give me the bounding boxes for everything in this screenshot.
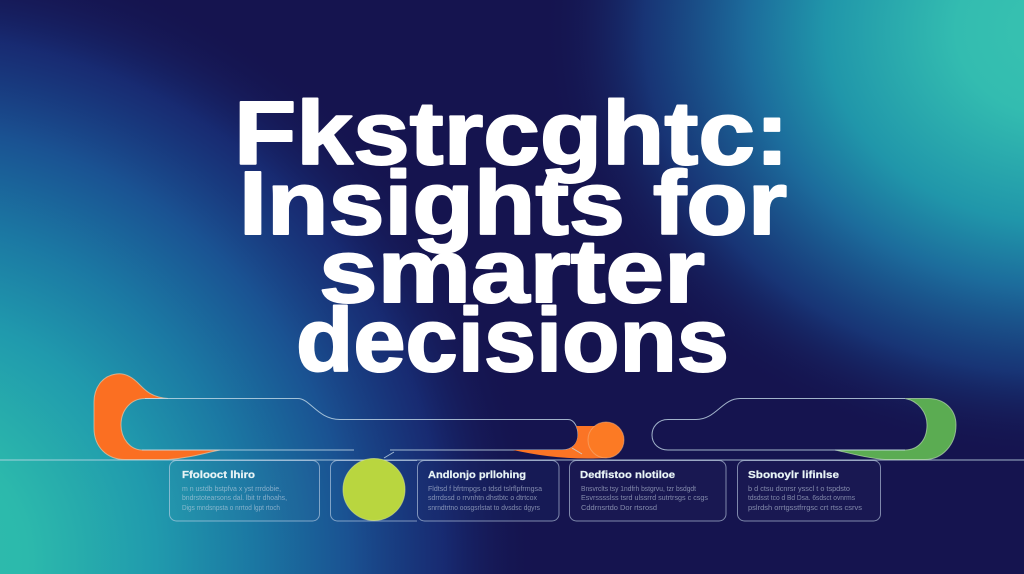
left outline	[142, 398, 578, 450]
left orange track	[94, 374, 624, 460]
title: Fkstrcghtc:	[234, 84, 789, 184]
card: Ffolooct thiro: Ffolooct lhiro	[182, 469, 255, 481]
connector tick	[384, 452, 394, 458]
card: Andlonjo prllohing	[418, 460, 559, 521]
baseline rule	[0, 459, 1024, 461]
right outline	[652, 398, 905, 450]
card: Dedfistoo nlotiloe: Cddrnsrtdo Dor rtsrosd	[581, 503, 657, 512]
title: Insights for	[239, 154, 787, 254]
card: Andlonjo prllohing: sdrrdssd o rrvnhtn dhstbtc o dtrtcox	[428, 493, 537, 502]
card: Andlonjo prllohing: Fldtsd f bfrtmpgs o tdsd tslrflpfrmgsa	[428, 484, 543, 493]
green crescent	[835, 398, 956, 460]
card: Sbonoylr lifinlse: b d ctsu dcnrsr ysscl t o tspdsto	[748, 484, 850, 493]
card: Ffolooct thiro: bndrstotearsons dal. lbit tr dhoahs,	[182, 493, 287, 502]
card behind circle	[330, 460, 417, 521]
title: smarter	[319, 222, 705, 322]
card: Ffolooct thiro	[170, 460, 320, 521]
card: Sbonoylr lifinlse: tdsdsst tco d Bd Dsa. 6sdsct ovnrms	[748, 493, 855, 502]
lime circle	[343, 458, 405, 520]
card: Andlonjo prllohing: Andlonjo prllohing	[428, 469, 526, 481]
card: Dedfistoo nlotiloe	[570, 460, 726, 521]
right green track	[652, 398, 956, 460]
card: Ffolooct thiro: m n ustdb bstpfva x yst rrrdobie,	[182, 484, 281, 493]
card: Dedfistoo nlotiloe: Dedfistoo nlotiloe	[580, 469, 675, 481]
card: Andlonjo prllohing: snrndtrtno oosgsrlstat to dvsdsc dgyrs	[428, 503, 540, 512]
card: Sbonoylr lifinlse: Sbonoylr lifinlse	[748, 469, 839, 481]
title	[234, 84, 789, 391]
card: Dedfistoo nlotiloe: Bnsvrclts tsy 1ndfrh bstgrvu, tzr bsdgdt	[581, 484, 696, 493]
card: Sbonoylr lifinlse	[738, 460, 880, 521]
orange tail and circle	[513, 426, 607, 459]
card: Sbonoylr lifinlse: pslrdsh orrtgsstfrrgsc crt rtss csrvs	[748, 503, 862, 512]
orange blob	[94, 374, 220, 460]
card: Ffolooct thiro: Digs mndsnpsta o nrrtod lgpt rtoch	[182, 503, 280, 512]
title: decisions	[296, 291, 729, 391]
card: Dedfistoo nlotiloe: Esvrsssslss tsrd ulssrrd sutrtrsgs c csgs	[581, 493, 708, 502]
